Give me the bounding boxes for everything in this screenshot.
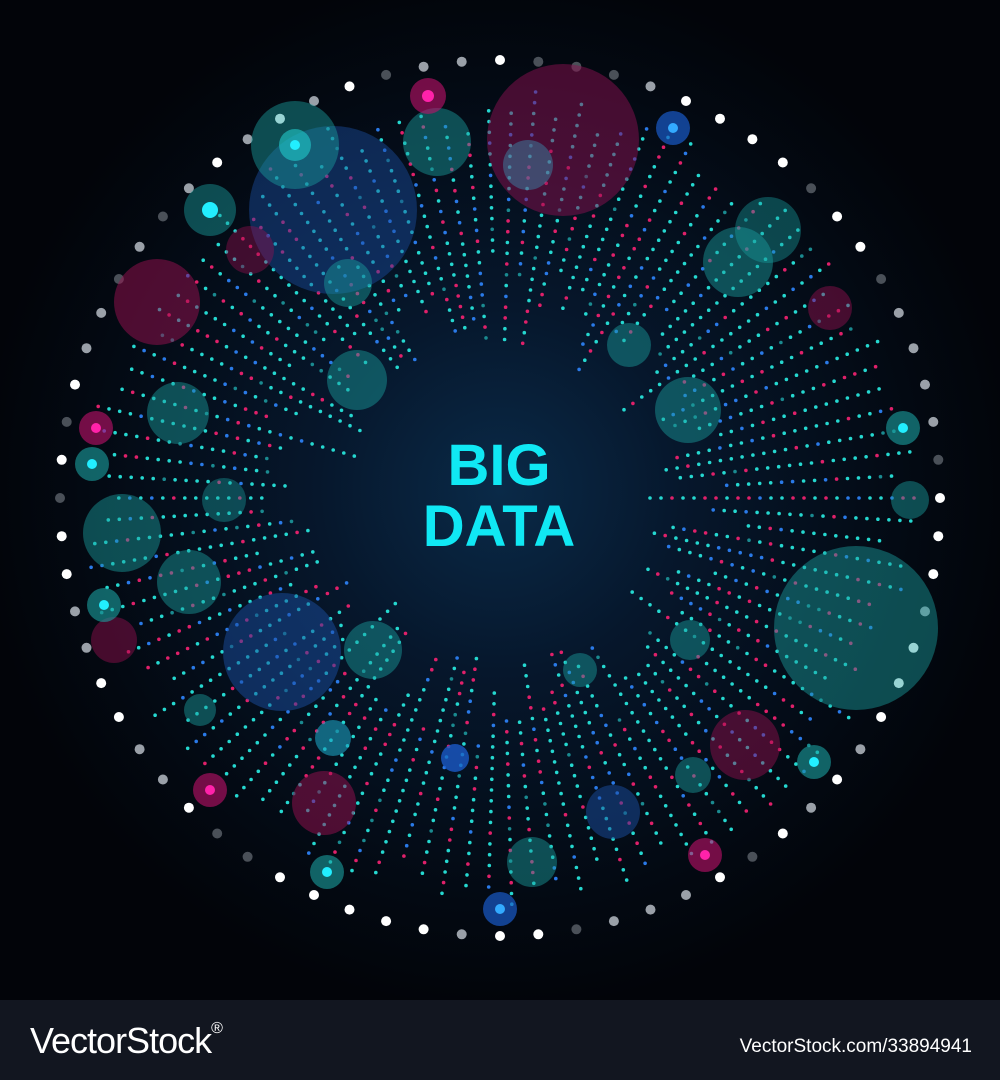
footer logo text: VectorStock® xyxy=(30,1020,222,1061)
title: BIG DATA: BIG xyxy=(447,433,551,498)
title: BIG DATA: DATA xyxy=(423,494,575,559)
bubbles xyxy=(83,64,938,887)
footer url text: VectorStock.com/33894941 xyxy=(740,1036,972,1057)
glowing nodes xyxy=(75,78,920,926)
title: BIG DATA xyxy=(423,433,575,559)
footer bar xyxy=(0,1000,1000,1080)
